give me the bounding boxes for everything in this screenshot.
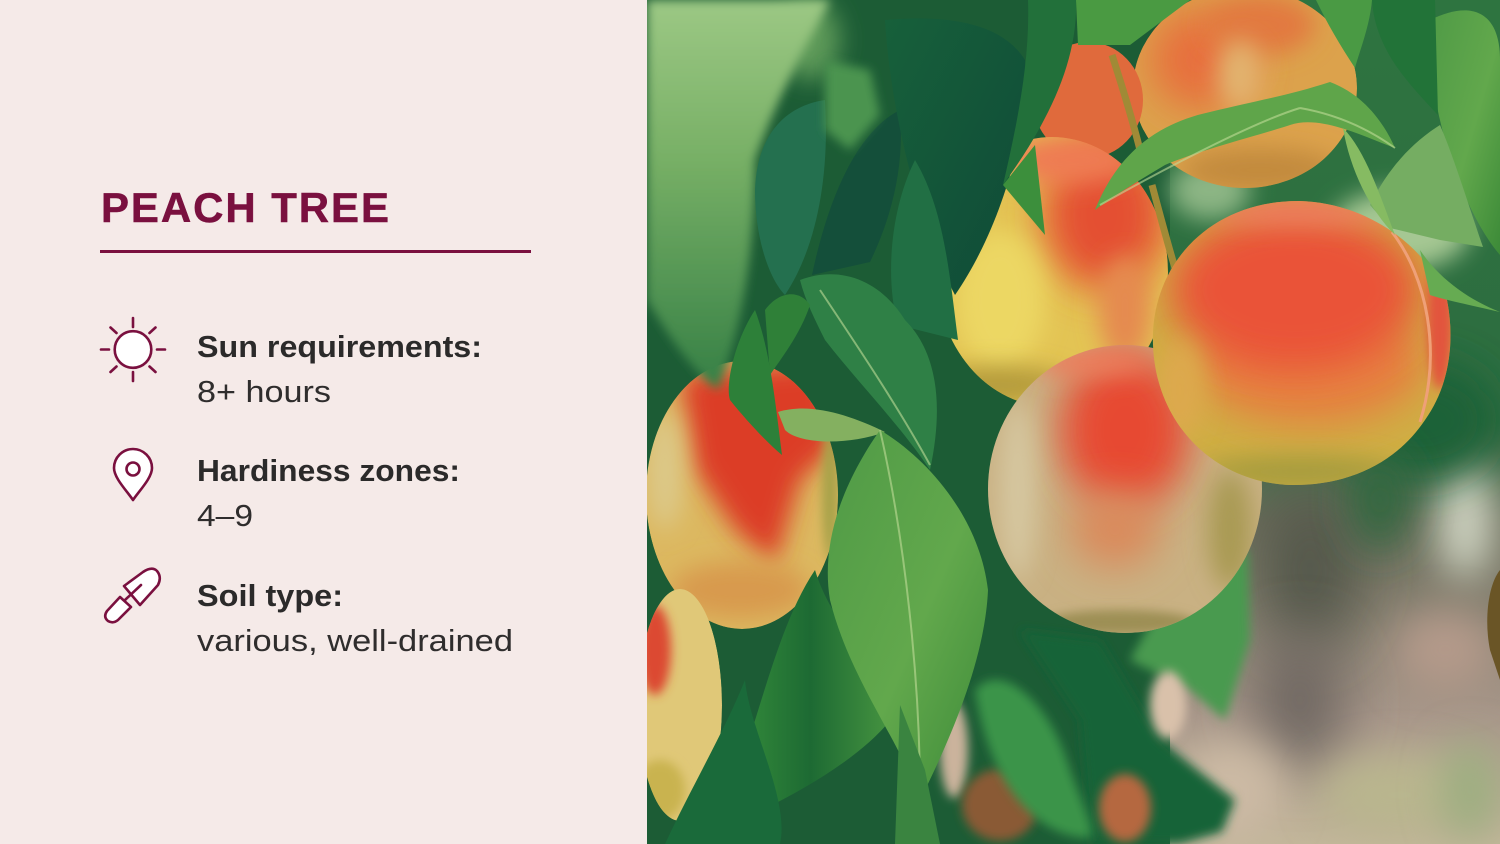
leaf: right under large peach bbox=[1420, 250, 1500, 312]
title: PEACH TREE bbox=[101, 184, 389, 231]
leaf: small pale green behind bbox=[825, 60, 880, 150]
text: sun requirements bbox=[197, 329, 482, 409]
text: hardiness zones: 4–9 bbox=[197, 498, 253, 533]
photo: peaches on a branch bbox=[635, 0, 1500, 844]
leaf: large central bright bbox=[828, 430, 988, 800]
icon: garden trowel bbox=[105, 569, 160, 622]
leaf: midrib lines bbox=[820, 108, 1395, 795]
leaf: top centre small bbox=[1076, 0, 1190, 45]
peach: large front right bbox=[1150, 195, 1460, 490]
leaf: lower bright bbox=[754, 570, 885, 802]
leaf: bottom left dark bbox=[665, 680, 782, 844]
peach: small top centre bbox=[1033, 42, 1143, 158]
leaf: middle green bbox=[800, 274, 937, 470]
peach: centre upper bbox=[951, 137, 1168, 401]
leaf: dark upper bbox=[755, 100, 826, 295]
leaf: short dark bbox=[891, 160, 958, 340]
stem: bottom bbox=[895, 705, 940, 844]
text: hardiness zones: Hardiness zones: bbox=[197, 453, 460, 488]
title underline bbox=[100, 250, 531, 253]
leaf: top bright bbox=[1095, 82, 1395, 210]
icon: sun bbox=[101, 318, 165, 381]
text: sun requirements: 8+ hours bbox=[197, 374, 331, 409]
leaf: narrow curled bbox=[1343, 128, 1395, 235]
leaf: top right thin bbox=[1316, 0, 1372, 68]
icon: location pin bbox=[114, 449, 152, 500]
leaf: top stem leaf bbox=[1003, 0, 1076, 185]
stem bbox=[1112, 55, 1175, 268]
text: soil type: Soil type: bbox=[197, 578, 343, 613]
peach: top right, partly hidden bbox=[1133, 0, 1357, 192]
peach: right edge sliver bbox=[1487, 570, 1500, 680]
left panel background bbox=[0, 0, 647, 844]
leaf: small between peaches bbox=[1003, 145, 1045, 235]
photo background foliage and bokeh bbox=[647, 0, 1500, 844]
leaf: large dark top bbox=[897, 30, 1025, 295]
text: soil type bbox=[197, 578, 513, 658]
peach: bottom left bbox=[647, 589, 722, 820]
leaf: top right corner bbox=[1430, 10, 1500, 255]
leaf: pale small pointing right bbox=[778, 409, 885, 442]
leaf: upper right bright bbox=[1370, 125, 1483, 247]
text: hardiness zones bbox=[197, 453, 460, 533]
leaf: hanging small bbox=[729, 310, 782, 455]
peach: left middle bbox=[646, 360, 838, 629]
leaf: dark shade behind bbox=[812, 110, 901, 275]
text: soil type: various, well-drained bbox=[197, 623, 513, 658]
leaf: small middle dark bbox=[765, 294, 810, 375]
leaf: blurred top left bbox=[647, 0, 830, 390]
peach: large front centre bbox=[980, 340, 1270, 640]
text: sun requirements: Sun requirements: bbox=[197, 329, 482, 364]
